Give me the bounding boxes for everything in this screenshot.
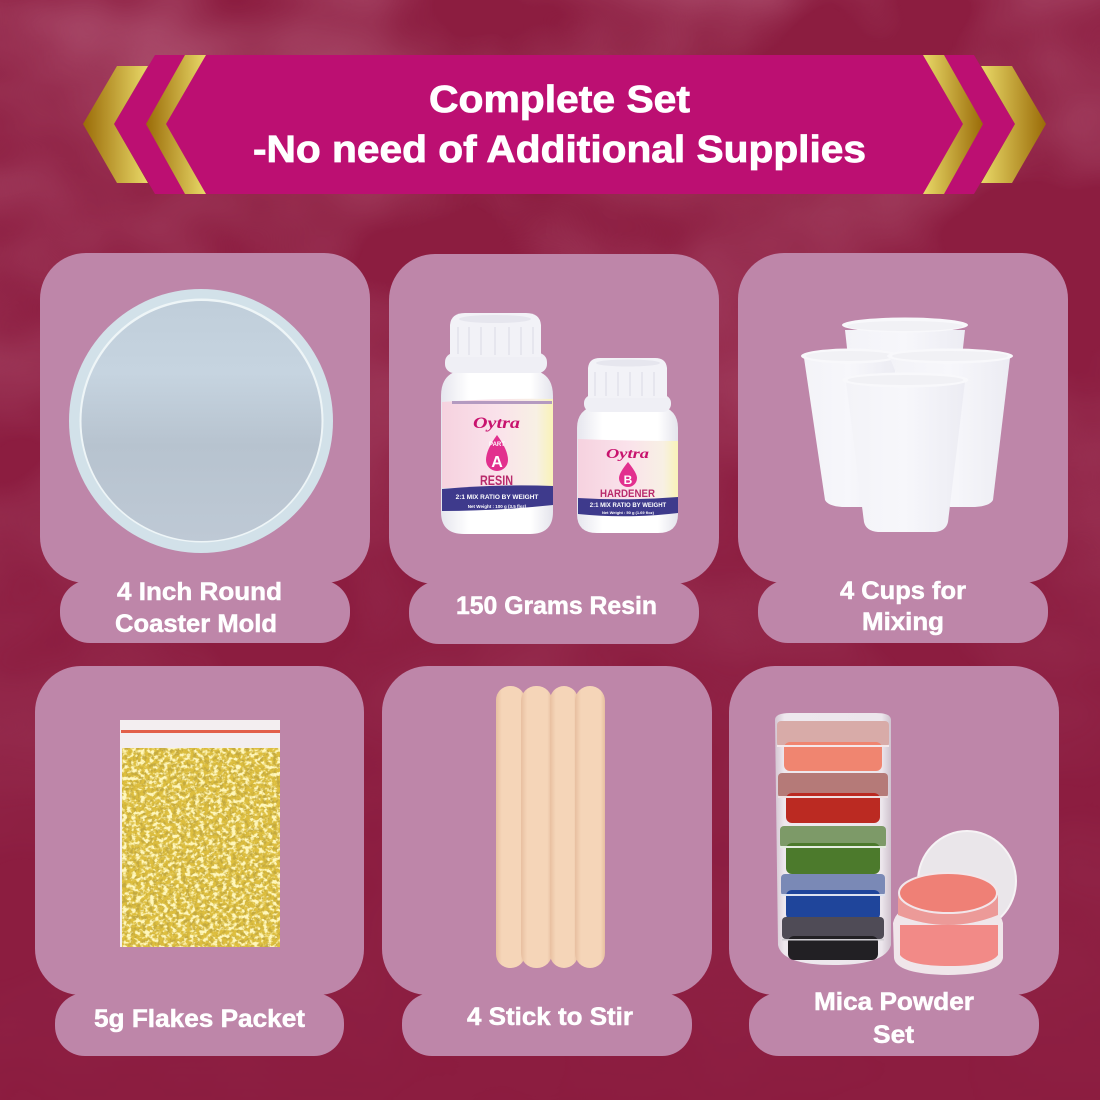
panel: gold flakes [35, 666, 364, 1056]
left outer gold chevron [83, 66, 148, 183]
label: mica powder [814, 988, 974, 1049]
icon: resin bottle part A: Oytra [473, 415, 520, 432]
label: sticks: 4 Stick to Stir [467, 1003, 633, 1031]
icon: open mica jar with lid [893, 831, 1016, 975]
panel: resin bottles [389, 254, 719, 644]
label: flakes: 5g Flakes Packet [94, 1005, 306, 1033]
label: mica powder: Set [873, 1021, 915, 1049]
icon: stacked mica jars [775, 713, 891, 965]
icon: flakes packet [120, 720, 280, 947]
label: resin: 150 Grams Resin [456, 592, 657, 620]
label: coaster mold: 4 Inch Round [117, 578, 282, 606]
icon: four paper cups [801, 318, 1013, 532]
banner ribbon [114, 55, 1015, 194]
icon: resin bottle part A [441, 313, 553, 534]
right outer gold chevron [981, 66, 1046, 183]
icon: resin bottle part A: RESIN [480, 472, 513, 488]
label: coaster mold: Coaster Mold [115, 610, 277, 638]
icon: resin bottle part A: 2:1 MIX RATIO BY WEIGHT [456, 494, 538, 501]
icon: resin bottle part A: Net Weight : 100 g (3.5 floz) [468, 504, 527, 509]
icon: four wooden sticks [496, 686, 605, 968]
label: cups [840, 577, 966, 636]
panel: mica powder [729, 666, 1059, 1056]
label: cups: Mixing [862, 608, 944, 636]
right inner gold chevron [923, 55, 983, 194]
icon: resin bottle part A: A [491, 454, 503, 471]
icon: hardener bottle part B [577, 358, 678, 533]
icon: hardener bottle part B: 2:1 MIX RATIO BY WEIGHT [590, 503, 667, 509]
panel: stir sticks [382, 666, 712, 1056]
heading line one: Complete Set [429, 79, 690, 121]
icon: hardener bottle part B: Net Weight : 50 g (1.69 floz) [602, 510, 655, 515]
icon: resin bottle part A: PART [489, 442, 505, 448]
background: mottled crimson texture [0, 0, 1100, 782]
icon: hardener bottle part B: Oytra [606, 447, 649, 462]
title banner [83, 55, 1046, 194]
panel: mixing cups [738, 253, 1068, 643]
icon: hardener bottle part B: HARDENER [600, 488, 655, 500]
icon: round coaster mold [69, 289, 333, 553]
heading line two: -No need of Additional Supplies [253, 129, 866, 171]
label: mica powder: Mica Powder [814, 988, 974, 1016]
label: coaster mold [115, 578, 282, 638]
icon: hardener bottle part B: B [624, 473, 633, 487]
panel: coaster mold [40, 253, 370, 643]
label: cups: 4 Cups for [840, 577, 966, 605]
left inner gold chevron [146, 55, 206, 194]
